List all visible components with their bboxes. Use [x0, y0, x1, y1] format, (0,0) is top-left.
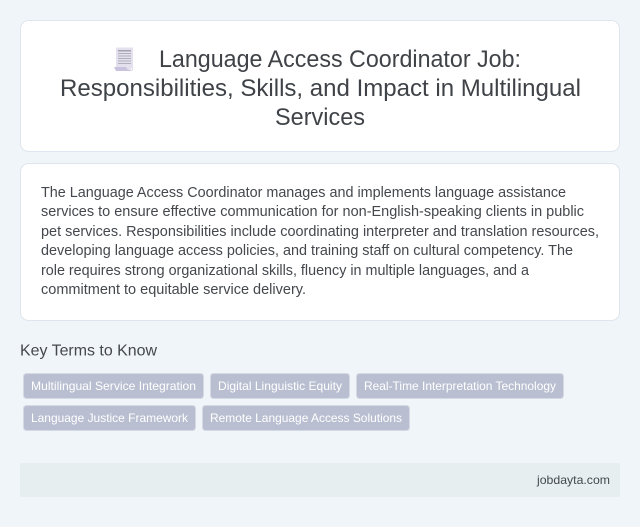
tag: language justice framework	[24, 406, 196, 430]
title: Language Access Coordinator Job:	[159, 46, 521, 73]
panel: description card	[20, 164, 620, 320]
tag: real-time interpretation technology	[356, 374, 564, 398]
tag: language justice framework: Language Justice Framework	[31, 411, 189, 425]
text block: description: role requires strong organizational skills, fluency in multiple languages, and a	[41, 263, 529, 279]
tag: digital linguistic equity	[210, 374, 350, 398]
tag: remote language access solutions: Remote Language Access Solutions	[210, 411, 402, 425]
tag: real-time interpretation technology: Real-Time Interpretation Technology	[364, 379, 556, 393]
text block: description: The Language Access Coordinator manages and implements language assistance	[41, 185, 566, 201]
title: Responsibilities, Skills, and Impact in Multilingual	[60, 75, 581, 102]
tag: remote language access solutions	[202, 406, 410, 430]
tag list: key terms	[24, 374, 564, 430]
text block: description	[41, 185, 599, 298]
heading: key terms: Key Terms to Know	[20, 342, 157, 360]
tag: multilingual service integration	[24, 374, 204, 398]
tag: multilingual service integration: Multilingual Service Integration	[31, 379, 196, 393]
text block: description: developing language access policies, and training staff on cultural competency. The	[41, 243, 573, 259]
panel: title card	[20, 20, 620, 152]
title: Services	[275, 104, 365, 131]
text block: description: pet services. Responsibilities include coordinating interpreter and translation resources,	[41, 224, 599, 240]
tag: digital linguistic equity: Digital Linguistic Equity	[218, 379, 342, 393]
icon: document scroll	[114, 48, 133, 71]
text block: description: commitment to equitable service delivery.	[41, 282, 306, 298]
footer source text: jobdayta.com	[536, 473, 610, 487]
text block: description: services to ensure effective communication for non-English-speaking clients in public	[41, 204, 584, 220]
title	[60, 46, 581, 131]
footer	[20, 463, 620, 497]
